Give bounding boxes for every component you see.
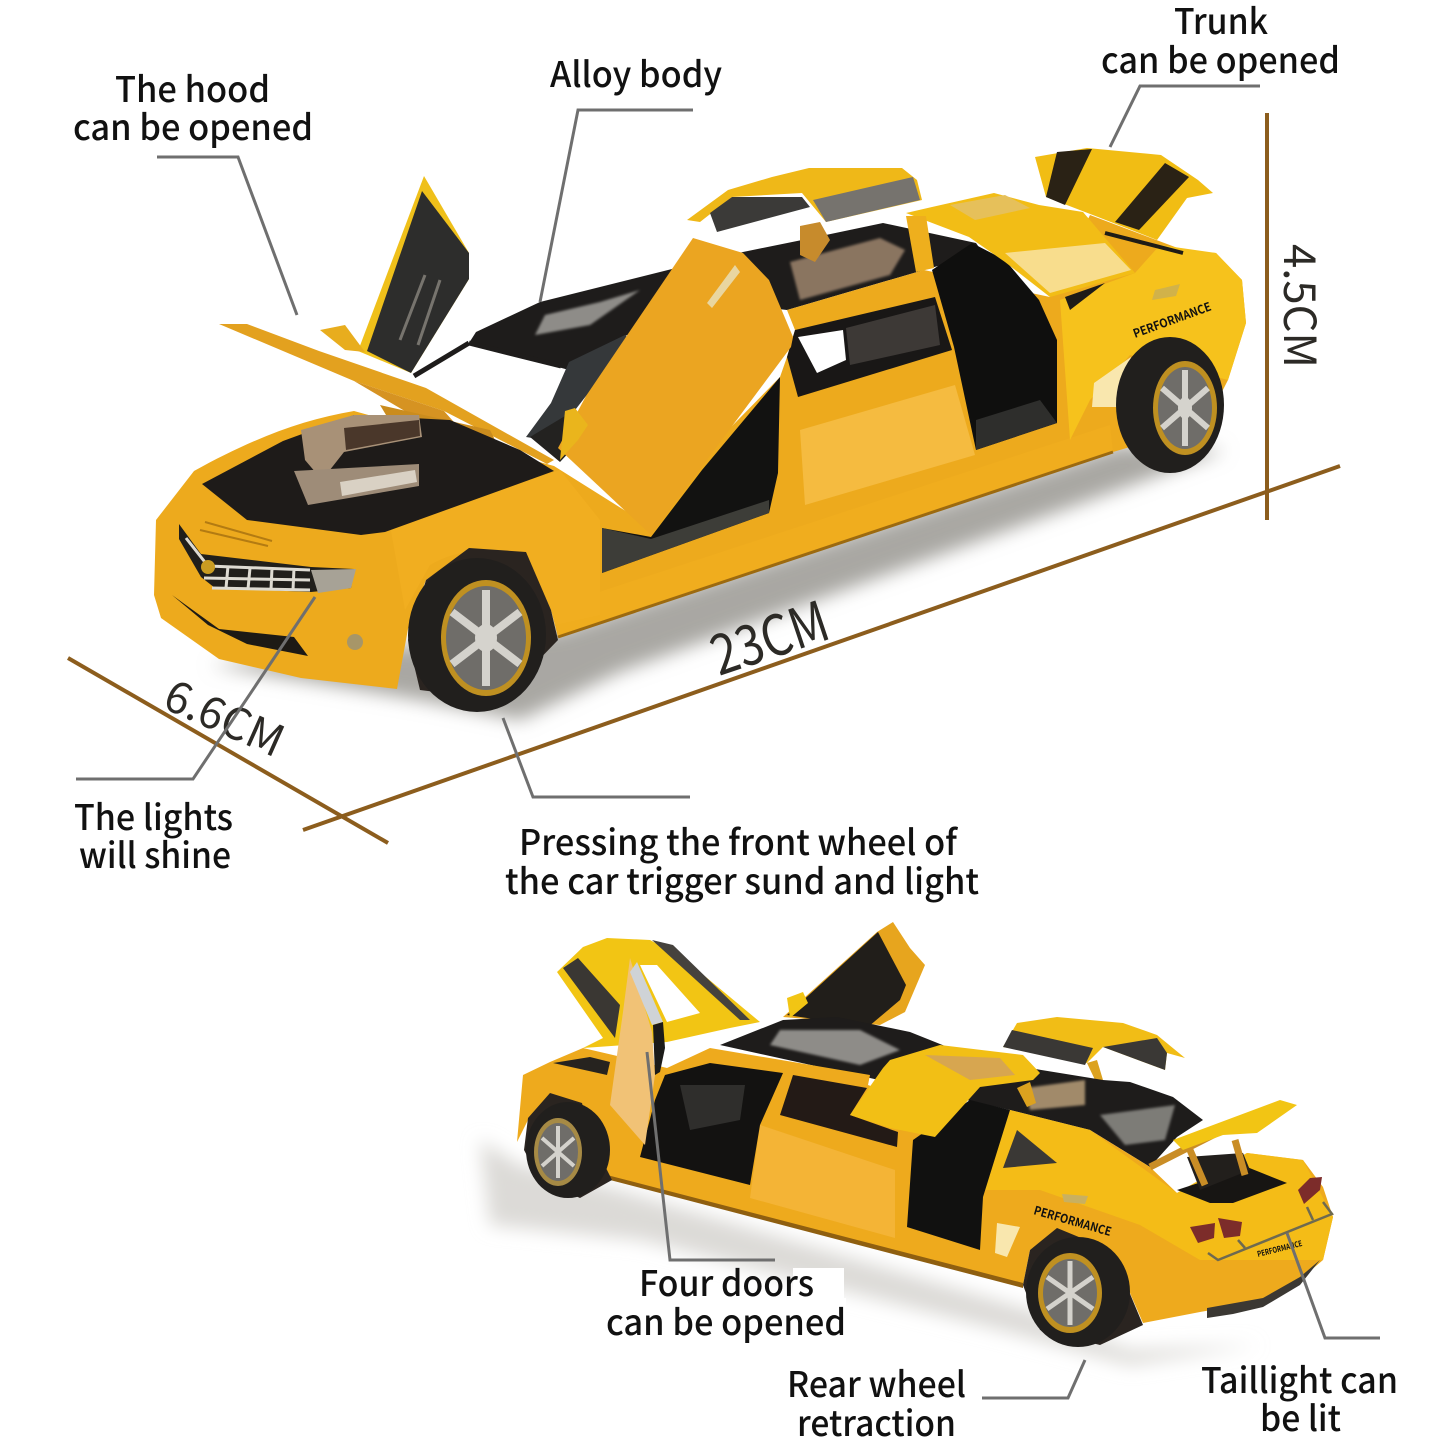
side window bbox=[780, 1075, 898, 1147]
roof with artwork bbox=[469, 223, 983, 370]
hood raised bbox=[219, 324, 554, 470]
roof with artwork bbox=[720, 1017, 1203, 1167]
taillight ticks bbox=[1238, 1207, 1313, 1248]
ground shadow bbox=[480, 1140, 1260, 1365]
rear wheel bbox=[1026, 1237, 1130, 1347]
label: lights: will shine bbox=[79, 828, 231, 879]
label: lights bbox=[74, 790, 233, 879]
dimension line: width bbox=[68, 658, 388, 843]
taillight bracket bbox=[1208, 1202, 1332, 1260]
front door raised bbox=[610, 958, 665, 1145]
rear door raised bbox=[850, 1045, 1040, 1137]
label: trunk: can be opened bbox=[1101, 33, 1340, 84]
chevy logo bbox=[1062, 1194, 1088, 1204]
rear door opening bbox=[932, 243, 1057, 450]
label: taillight: Taillight can bbox=[1201, 1353, 1398, 1404]
performance logo: PERFORMANCE bbox=[1131, 298, 1213, 342]
main car: front three-quarter view bbox=[154, 148, 1246, 720]
leader line: taillight bbox=[1287, 1233, 1380, 1338]
interior under hood bbox=[530, 410, 590, 462]
dimension line: length bbox=[303, 466, 1340, 830]
leader line: trunk bbox=[1110, 86, 1260, 147]
car body bbox=[154, 215, 1246, 689]
rear quarter bright yellow bbox=[985, 1110, 1333, 1260]
trunk opening bbox=[1177, 1167, 1287, 1203]
label: front wheel trigger bbox=[505, 815, 979, 905]
far door raised bbox=[783, 922, 925, 1027]
rear quarter bright yellow bbox=[1060, 245, 1246, 440]
front wheel bbox=[408, 558, 546, 712]
rear door opening bbox=[907, 1100, 1010, 1250]
label: rear wheel bbox=[787, 1357, 966, 1447]
label: front wheel trigger: Pressing the front wheel of bbox=[519, 815, 959, 866]
upper door raised bbox=[1003, 1017, 1185, 1082]
label: four doors: can be opened bbox=[606, 1295, 846, 1346]
left tail lights bbox=[1190, 1218, 1242, 1243]
headlight bbox=[311, 569, 356, 593]
rear wheel arch bbox=[1023, 1228, 1143, 1345]
rear wheel bbox=[1116, 337, 1224, 473]
leader line: front wheel bbox=[503, 718, 690, 797]
windshield pillar bbox=[526, 335, 640, 441]
label: hood: The hood bbox=[115, 62, 270, 113]
raised hood bbox=[557, 938, 760, 1048]
dimension label: 23CM: 23CM bbox=[699, 577, 838, 692]
front wheel bbox=[526, 1102, 610, 1198]
right tail lights bbox=[1298, 1177, 1322, 1204]
leader line: hood bbox=[157, 157, 297, 315]
label: taillight: be lit bbox=[1260, 1391, 1341, 1442]
trunk gap bbox=[1105, 233, 1183, 253]
chevy logo bbox=[1152, 284, 1180, 300]
label: trunk bbox=[1101, 0, 1340, 84]
rear door raised bbox=[906, 193, 1135, 297]
label: lights: The lights bbox=[74, 790, 233, 841]
front wheel arch bbox=[524, 1093, 612, 1198]
far door raised bbox=[358, 176, 469, 373]
ground shadow bbox=[210, 445, 1225, 720]
sill band bbox=[555, 425, 1113, 637]
label: front wheel trigger: the car trigger sund and light bbox=[505, 854, 979, 905]
trunk lid raised bbox=[1173, 1100, 1297, 1150]
front wheel arch bbox=[408, 548, 558, 700]
dimension label: 6.6CM: 6.6CM bbox=[156, 660, 296, 770]
rear quarter window bbox=[1003, 1130, 1057, 1168]
chrome engine bbox=[294, 415, 422, 505]
side stripes bbox=[995, 1223, 1020, 1257]
front door raised bbox=[558, 238, 793, 535]
fender highlight bbox=[390, 470, 600, 625]
leader line: four doors bbox=[647, 1052, 775, 1260]
label: taillight bbox=[1201, 1353, 1398, 1442]
upper rear door raised bbox=[687, 168, 922, 262]
rear bumper text: PERFORMANCE bbox=[1256, 1238, 1303, 1260]
engine bay bbox=[202, 415, 554, 535]
label: alloy body: Alloy body bbox=[550, 47, 722, 98]
lower sill shade bbox=[607, 1175, 1023, 1288]
front door opening bbox=[602, 377, 780, 573]
lower intake bbox=[172, 595, 308, 656]
label: rear wheel: retraction bbox=[797, 1396, 956, 1447]
rear diffuser bbox=[1207, 1260, 1320, 1318]
front door opening bbox=[640, 1063, 783, 1185]
small front vent bbox=[553, 1057, 610, 1075]
leader line: lights bbox=[76, 597, 315, 779]
label: four doors bbox=[606, 1256, 846, 1346]
sill edge bbox=[558, 452, 1113, 637]
front grille bbox=[179, 524, 354, 592]
leader line: alloy body bbox=[540, 110, 693, 302]
trunk underside bbox=[1187, 1153, 1250, 1190]
car body bbox=[517, 1048, 1333, 1323]
dimension label: 4.5CM: 4.5CM bbox=[1271, 244, 1335, 368]
label: four doors: Four doors bbox=[639, 1256, 814, 1307]
small side vent bbox=[1065, 283, 1105, 310]
trunk hinges bbox=[1150, 1133, 1245, 1185]
far hinge bbox=[320, 325, 365, 352]
label: hood: can be opened bbox=[73, 100, 313, 151]
middle window bbox=[787, 297, 952, 397]
dimension line: height bbox=[1265, 113, 1269, 520]
leader line: rear wheel bbox=[982, 1360, 1085, 1398]
second car: rear three-quarter view bbox=[480, 922, 1333, 1365]
label: hood bbox=[73, 62, 313, 151]
trunk lid raised bbox=[1035, 148, 1213, 240]
label: rear wheel: Rear wheel bbox=[787, 1357, 966, 1408]
performance logo: PERFORMANCE bbox=[1032, 1202, 1113, 1240]
windshield frame bbox=[414, 343, 561, 376]
side stripes bbox=[1092, 357, 1131, 407]
hood crease bbox=[200, 522, 272, 546]
fog lamp bbox=[347, 634, 363, 650]
door panel highlight bbox=[750, 1125, 895, 1238]
lit door panel bbox=[800, 385, 975, 505]
